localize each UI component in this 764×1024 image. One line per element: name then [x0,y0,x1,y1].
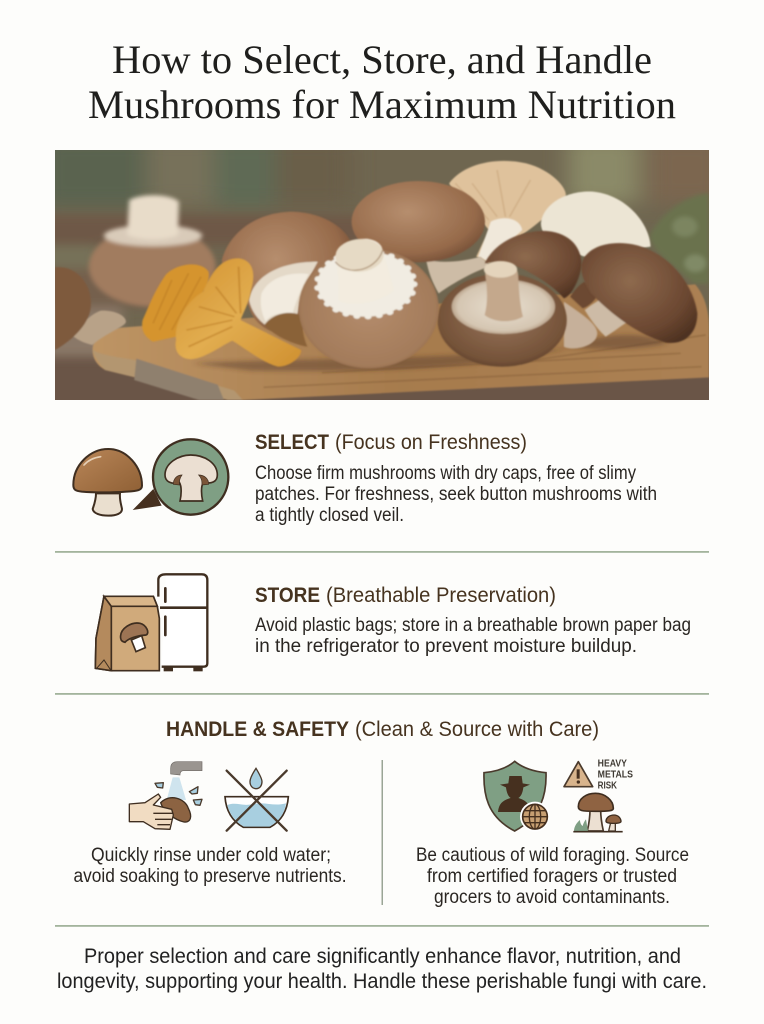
closing summary text: Proper selection and care significantly enhance flavor, nutrition, and [84,945,681,968]
icon: heavy metals warning with mushrooms [564,759,633,832]
handle body text right: grocers to avoid contaminants. [434,887,670,908]
store heading: (Breathable Preservation) [326,584,556,607]
select heading: SELECT [255,431,329,454]
select body text: Choose firm mushrooms with dry caps, free of slimy [255,463,636,484]
top centre mushroom [352,181,489,293]
select heading: (Focus on Freshness) [335,431,527,454]
store body text: in the refrigerator to prevent moisture buildup. [255,636,637,657]
icon: select mushroom with cross-section bubble [73,439,228,516]
handle body text right: from certified foragers or trusted [427,866,677,887]
store heading: STORE [255,584,320,607]
store body text: Avoid plastic bags; store in a breathable brown paper bag [255,615,691,636]
icon: paper bag and refrigerator [95,574,207,671]
front centre mushroom [299,236,439,368]
icon: forager shield with globe [484,761,550,832]
closing summary text [57,945,707,993]
handle body text left [74,845,346,887]
handle body text left: Quickly rinse under cold water; [91,845,331,866]
handle body text left: avoid soaking to preserve nutrients. [74,866,346,887]
back left mushroom [89,195,216,307]
handle body text right [416,845,689,908]
icon: no soaking in a bowl [225,768,288,831]
title: How to Select, Store, and Handle [112,37,652,82]
store body text [255,615,691,657]
icon: heavy metals warning with mushrooms: METALS [598,770,633,781]
closing summary text: longevity, supporting your health. Handle these perishable fungi with care. [57,970,707,993]
far left mushroom [55,267,126,350]
title [88,37,676,127]
icon: rinsing a mushroom under a tap [129,762,202,829]
left large mushroom [222,212,351,347]
photo: assorted mushrooms on a wooden board [38,137,727,400]
icon: heavy metals warning with mushrooms: HEAVY [598,759,627,770]
select body text: patches. For freshness, seek button mushrooms with [255,484,657,505]
right shiitake [581,243,697,343]
white mushroom [541,192,651,257]
oyster mushroom [449,161,651,263]
board [93,284,709,400]
handle body text right: Be cautious of wild foraging. Source [416,845,689,866]
upside down front shiitake [437,261,567,367]
chanterelles [142,258,301,367]
handle and safety heading: HANDLE & SAFETY [166,718,349,741]
handle and safety heading: (Clean & Source with Care) [355,718,599,741]
select body text [255,463,657,526]
icon: heavy metals warning with mushrooms: RISK [598,780,617,791]
moss [649,193,709,283]
shiitake mushroom back [485,231,599,349]
select heading [255,431,527,454]
select body text: a tightly closed veil. [255,505,404,526]
handle and safety heading [166,718,599,741]
title: Mushrooms for Maximum Nutrition [88,82,676,127]
